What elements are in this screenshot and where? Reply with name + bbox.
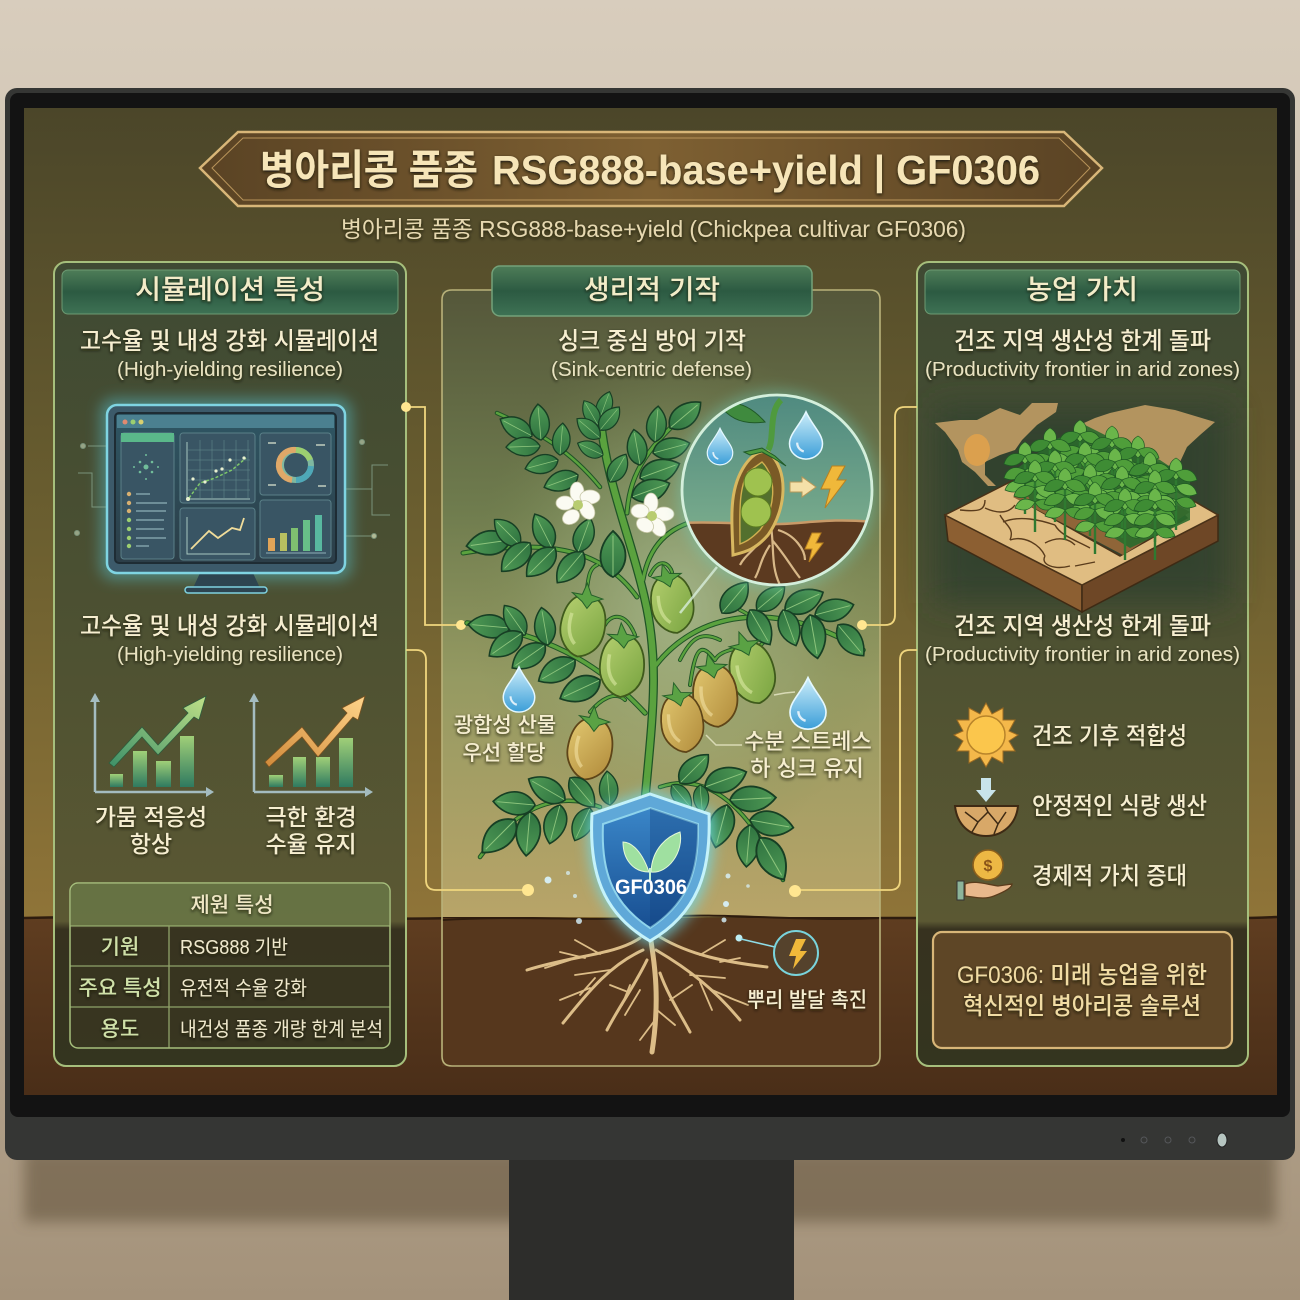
text: value 2: (Productivity frontier in arid zones) — [925, 644, 1240, 666]
table: germplasm traits: 유전적 수율 강화 — [180, 977, 307, 1000]
table: germplasm traits: 용도 — [101, 1018, 139, 1041]
icon: root energy bolt — [736, 931, 818, 975]
callout lines — [706, 692, 795, 745]
text: value 1: (Productivity frontier in arid zones) — [925, 359, 1240, 381]
energy bolt — [821, 466, 846, 508]
text: simulation 1: (High-yielding resilience) — [117, 359, 343, 381]
label: root development: 뿌리 발달 촉진 — [747, 989, 867, 1012]
text: simulation 2 — [80, 613, 379, 666]
title banner — [200, 132, 1102, 206]
text: value 2: 건조 지역 생산성 한계 돌파 — [954, 613, 1211, 640]
control buttons — [1121, 1133, 1227, 1147]
title text: 병아리콩 품종 — [260, 147, 478, 193]
icon: left water drop — [503, 667, 535, 712]
text: sink-centric defense: 싱크 중심 방어 기작 — [558, 328, 746, 355]
header: value — [925, 270, 1240, 314]
magnified pod body — [732, 448, 786, 555]
table: germplasm traits: 주요 특성 — [78, 977, 162, 1000]
icon: cracked ground with arrow — [955, 778, 1018, 836]
arrow to energy — [790, 477, 816, 497]
connectors — [401, 402, 917, 897]
title text: RSG888-base+yield | GF0306 — [492, 147, 1040, 193]
roots — [527, 935, 767, 1052]
shield: GF0306: GF0306 — [615, 876, 687, 899]
header: simulation: 시뮬레이션 특성 — [135, 275, 325, 305]
label: water stress sink: 하 싱크 유지 — [750, 756, 864, 781]
callout: GF0306 solution — [933, 932, 1232, 1048]
panel: agricultural value — [917, 262, 1248, 1066]
header: physiological mechanism: 생리적 기작 — [584, 275, 720, 305]
header: physiological mechanism — [492, 266, 812, 316]
label: drought adaptation: 항상 — [130, 831, 172, 857]
illustration: chickpea plant — [463, 389, 872, 886]
sprout — [623, 832, 681, 872]
drops — [707, 428, 733, 465]
text: simulation 1 — [80, 328, 379, 381]
header: simulation — [62, 270, 398, 314]
text: arid suitability: 건조 기후 적합성 — [1032, 723, 1187, 750]
table: germplasm traits — [70, 883, 390, 1048]
label: photosynthate allocation — [454, 714, 556, 765]
label: extreme environment — [265, 804, 357, 857]
icon: coin and hand: $ — [984, 858, 993, 875]
text: value 1 — [925, 328, 1240, 381]
table: germplasm traits: 기원 — [101, 936, 139, 959]
text: sink-centric defense — [551, 328, 752, 381]
screen background — [24, 108, 1277, 1095]
table: germplasm traits: 내건성 품종 개량 한계 분석 — [180, 1018, 383, 1041]
label: extreme environment: 수율 유지 — [265, 831, 357, 857]
text: value 1: 건조 지역 생산성 한계 돌파 — [954, 328, 1211, 355]
sparkles — [544, 871, 750, 924]
chickpea pods — [556, 560, 781, 783]
panel: simulation — [54, 262, 406, 1066]
panel: mechanism — [442, 290, 890, 1066]
subtitle: 병아리콩 품종 RSG888-base+yield (Chickpea cultivar GF0306) — [341, 216, 966, 242]
icon: dashboard monitor — [74, 398, 390, 593]
label: drought adaptation — [95, 804, 207, 857]
leaves: lower branches — [474, 747, 795, 886]
label: photosynthate allocation: 광합성 산물 — [454, 714, 556, 737]
icon: sun — [954, 703, 1018, 767]
text: economic value: 경제적 가치 증대 — [1032, 863, 1187, 890]
soil bolt — [805, 533, 823, 562]
label: photosynthate allocation: 우선 할당 — [462, 742, 546, 765]
flowers — [556, 482, 674, 539]
table: germplasm traits: 제원 특성 — [190, 894, 274, 917]
callout: magnified pod — [677, 390, 877, 613]
callout: GF0306 solution: GF0306: 미래 농업을 위한 — [957, 962, 1207, 989]
text: simulation 1: 고수율 및 내성 강화 시뮬레이션 — [80, 328, 379, 355]
title text — [260, 147, 1040, 193]
label: extreme environment: 극한 환경 — [265, 804, 357, 830]
header: value: 농업 가치 — [1026, 275, 1138, 305]
label: water stress sink: 수분 스트레스 — [744, 729, 872, 754]
text: stable food production: 안정적인 식량 생산 — [1032, 793, 1207, 820]
label: drought adaptation: 가뭄 적응성 — [95, 804, 207, 830]
larger drop — [790, 412, 822, 459]
stems — [463, 407, 863, 880]
leaves: upper left branch — [496, 389, 708, 507]
chart: drought adaptation — [90, 693, 214, 797]
text: value 2 — [925, 613, 1240, 666]
monitor stand — [509, 1158, 794, 1300]
icon: right water drop — [790, 678, 826, 729]
callout: GF0306 solution: 혁신적인 병아리콩 솔루션 — [963, 993, 1201, 1020]
icon: coin and hand — [957, 850, 1012, 900]
world map — [935, 403, 1215, 486]
text: sink-centric defense: (Sink-centric defense) — [551, 359, 752, 381]
chart: yield in extreme environment — [249, 693, 373, 797]
dry soil slab — [945, 458, 1218, 612]
chickpea crop — [1004, 420, 1197, 560]
illustration: world map and arid field — [935, 403, 1230, 612]
leaves: middle branches — [465, 509, 872, 709]
text: simulation 2: (High-yielding resilience) — [117, 644, 343, 666]
shield: GF0306 — [588, 790, 714, 946]
table: germplasm traits: RSG888 기반 — [180, 936, 288, 959]
text: simulation 2: 고수율 및 내성 강화 시뮬레이션 — [80, 613, 379, 640]
label: water stress sink — [744, 729, 872, 781]
